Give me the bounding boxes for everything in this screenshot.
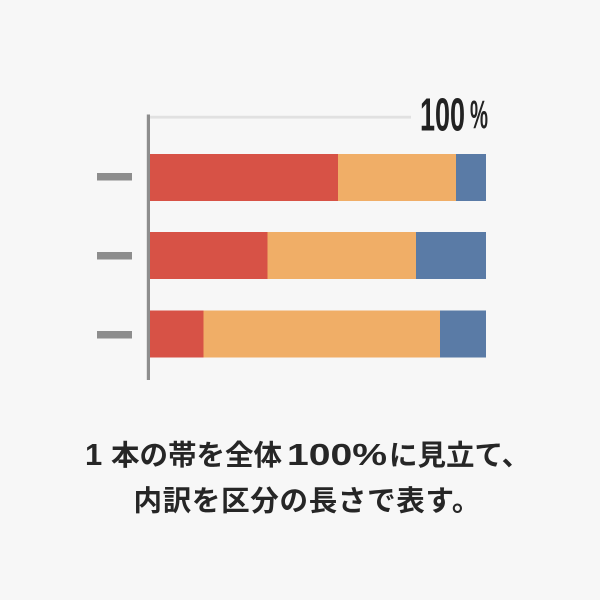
- stacked bar 3: [150, 310, 486, 358]
- row label placeholder 2: [97, 252, 132, 260]
- row label placeholder 3: [97, 331, 132, 338]
- caption: 内訳を区分の長さで表す。: [134, 486, 481, 518]
- label: 100%: 100: [420, 88, 465, 140]
- label: 100%: %: [470, 93, 488, 137]
- caption: に見立て、: [389, 440, 530, 472]
- stacked bar 2: [150, 232, 486, 279]
- caption: 1: [85, 437, 102, 472]
- row label placeholder 1: [97, 173, 132, 180]
- vertical axis: [147, 114, 150, 380]
- caption: 本の帯を全体: [111, 440, 283, 472]
- stacked bar 1: [150, 154, 486, 201]
- caption: [85, 437, 530, 518]
- 100% reference line: [150, 116, 411, 119]
- caption: 100%: [287, 437, 387, 472]
